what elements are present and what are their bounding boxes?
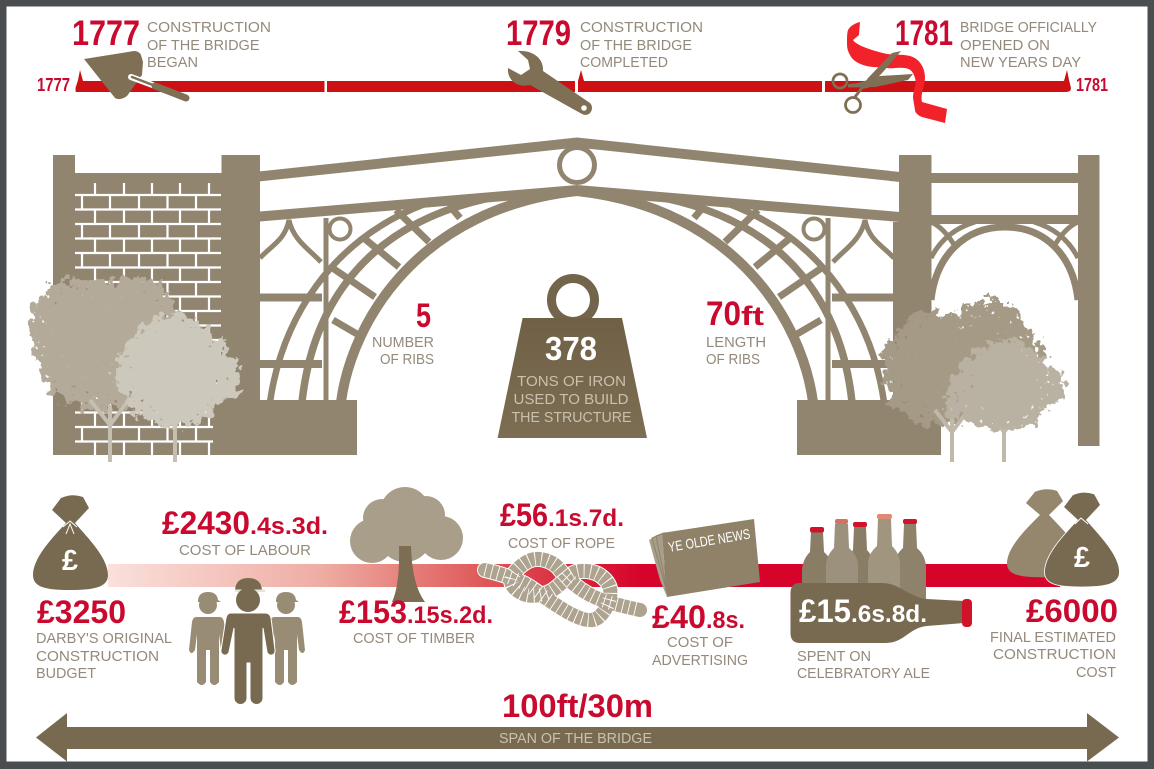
cost: rope: COST OF ROPE (508, 535, 615, 552)
cost: final estimate (990, 593, 1118, 681)
icon: newspaper: YE OLDE NEWS (667, 525, 751, 555)
weight: tons of iron: TONS OF IRON (517, 374, 626, 390)
cost: original budget: CONSTRUCTION (36, 648, 159, 665)
cost: advertising: ADVERTISING (652, 652, 748, 669)
milestone 1781: 1781 (895, 14, 953, 53)
icon: ale bottle with cost: .6s.8d. (851, 601, 927, 628)
span value: 100ft/30m (502, 688, 653, 724)
cost: original budget: £3250 (37, 594, 126, 630)
milestone 1779: CONSTRUCTION (580, 19, 703, 36)
weight: tons of iron: THE STRUCTURE (512, 410, 632, 426)
right side span (931, 173, 1079, 300)
cost: rope (500, 497, 624, 552)
cost: ale label (797, 648, 930, 682)
cost: ale label: CELEBRATORY ALE (797, 665, 930, 682)
icon: money bag budget: £ (62, 545, 78, 577)
bridge (53, 138, 1100, 455)
stat: length of ribs (706, 295, 766, 368)
cost: ale label: SPENT ON (797, 648, 871, 665)
cost: advertising: £40 (652, 599, 706, 635)
milestone 1777: BEGAN (147, 54, 198, 71)
milestone 1777: CONSTRUCTION (147, 19, 271, 36)
stat: number of ribs: 5 (416, 297, 431, 335)
icon: money bag budget (33, 495, 108, 590)
span arrow (36, 713, 1119, 762)
cost: advertising: COST OF (667, 634, 733, 651)
cost: final estimate: £6000 (1026, 593, 1118, 629)
stat: length of ribs: 70 (706, 295, 741, 333)
timeline bar (76, 70, 1071, 92)
tree group: left (29, 276, 240, 462)
milestone 1781: OPENED ON (960, 37, 1050, 54)
cost: timber: COST OF TIMBER (353, 630, 475, 647)
milestone 1781: BRIDGE OFFICIALLY (960, 19, 1097, 36)
stat: length of ribs: LENGTH (706, 334, 766, 351)
icon: trowel (84, 51, 186, 99)
icon: two money bags (1007, 489, 1120, 587)
milestone 1781: NEW YEARS DAY (960, 54, 1081, 71)
cost: rope: £56 (500, 497, 548, 533)
cost: labour: COST OF LABOUR (179, 542, 311, 559)
icon: newspaper (649, 519, 760, 597)
cost: rope: .1s.7d. (548, 505, 624, 532)
cost: labour (162, 505, 328, 559)
weight: tons of iron (498, 278, 647, 438)
cost: original budget (36, 594, 172, 682)
milestone 1779: 1779 (506, 14, 571, 53)
cost: labour: £2430 (162, 505, 250, 541)
icon: standing ale bottles (802, 514, 926, 605)
milestone 1779: OF THE BRIDGE (580, 37, 692, 54)
stat: number of ribs (372, 297, 434, 368)
cost: timber: £153 (339, 594, 407, 630)
cost: final estimate: COST (1076, 664, 1116, 681)
icon: ale bottle with cost (790, 583, 972, 643)
cost: final estimate: CONSTRUCTION (993, 646, 1116, 663)
icon: ale bottle with cost: £15 (799, 593, 851, 629)
icon: rope knot (485, 559, 640, 620)
milestone 1777: 1777 (72, 14, 140, 53)
stat: number of ribs: NUMBER (372, 334, 434, 351)
left half of arch ironwork (213, 138, 577, 455)
cost bar (108, 564, 1060, 587)
milestone 1777: OF THE BRIDGE (147, 37, 260, 54)
milestone 1777 (72, 14, 271, 71)
milestone 1779 (506, 14, 703, 71)
cost: final estimate: FINAL ESTIMATED (990, 629, 1116, 646)
weight: tons of iron: 378 (545, 330, 597, 367)
icon: ribbon (847, 22, 947, 123)
left wall with brickwork (53, 155, 260, 455)
icon: two money bags: £ (1074, 542, 1090, 574)
tree group: right (882, 300, 1063, 462)
milestone 1781 (895, 14, 1097, 71)
end year label: 1781 (1076, 75, 1108, 95)
span arrow: SPAN OF THE BRIDGE (499, 731, 652, 747)
icon: workers (189, 578, 305, 705)
right end post (1078, 155, 1100, 446)
icon: oak tree (350, 487, 463, 602)
right half of arch ironwork (577, 138, 941, 455)
icon: spanner (508, 51, 592, 115)
stat: length of ribs: OF RIBS (706, 351, 760, 368)
weight: tons of iron: USED TO BUILD (514, 392, 628, 408)
icon: scissors (833, 51, 913, 112)
cost: timber (339, 594, 493, 647)
cost: labour: .4s.3d. (250, 513, 328, 540)
milestone 1779: COMPLETED (580, 54, 668, 71)
centre ring (560, 148, 594, 182)
stat: length of ribs: ft (741, 301, 764, 331)
start year label: 1777 (37, 75, 70, 95)
cost: original budget: DARBY'S ORIGINAL (36, 630, 172, 647)
cost: advertising: .8s. (706, 607, 745, 634)
cost: advertising (652, 599, 748, 669)
right pier (899, 155, 932, 455)
stat: number of ribs: OF RIBS (380, 351, 434, 368)
cost: timber: .15s.2d. (407, 602, 493, 629)
cost: original budget: BUDGET (36, 665, 96, 682)
timeline (37, 14, 1108, 123)
